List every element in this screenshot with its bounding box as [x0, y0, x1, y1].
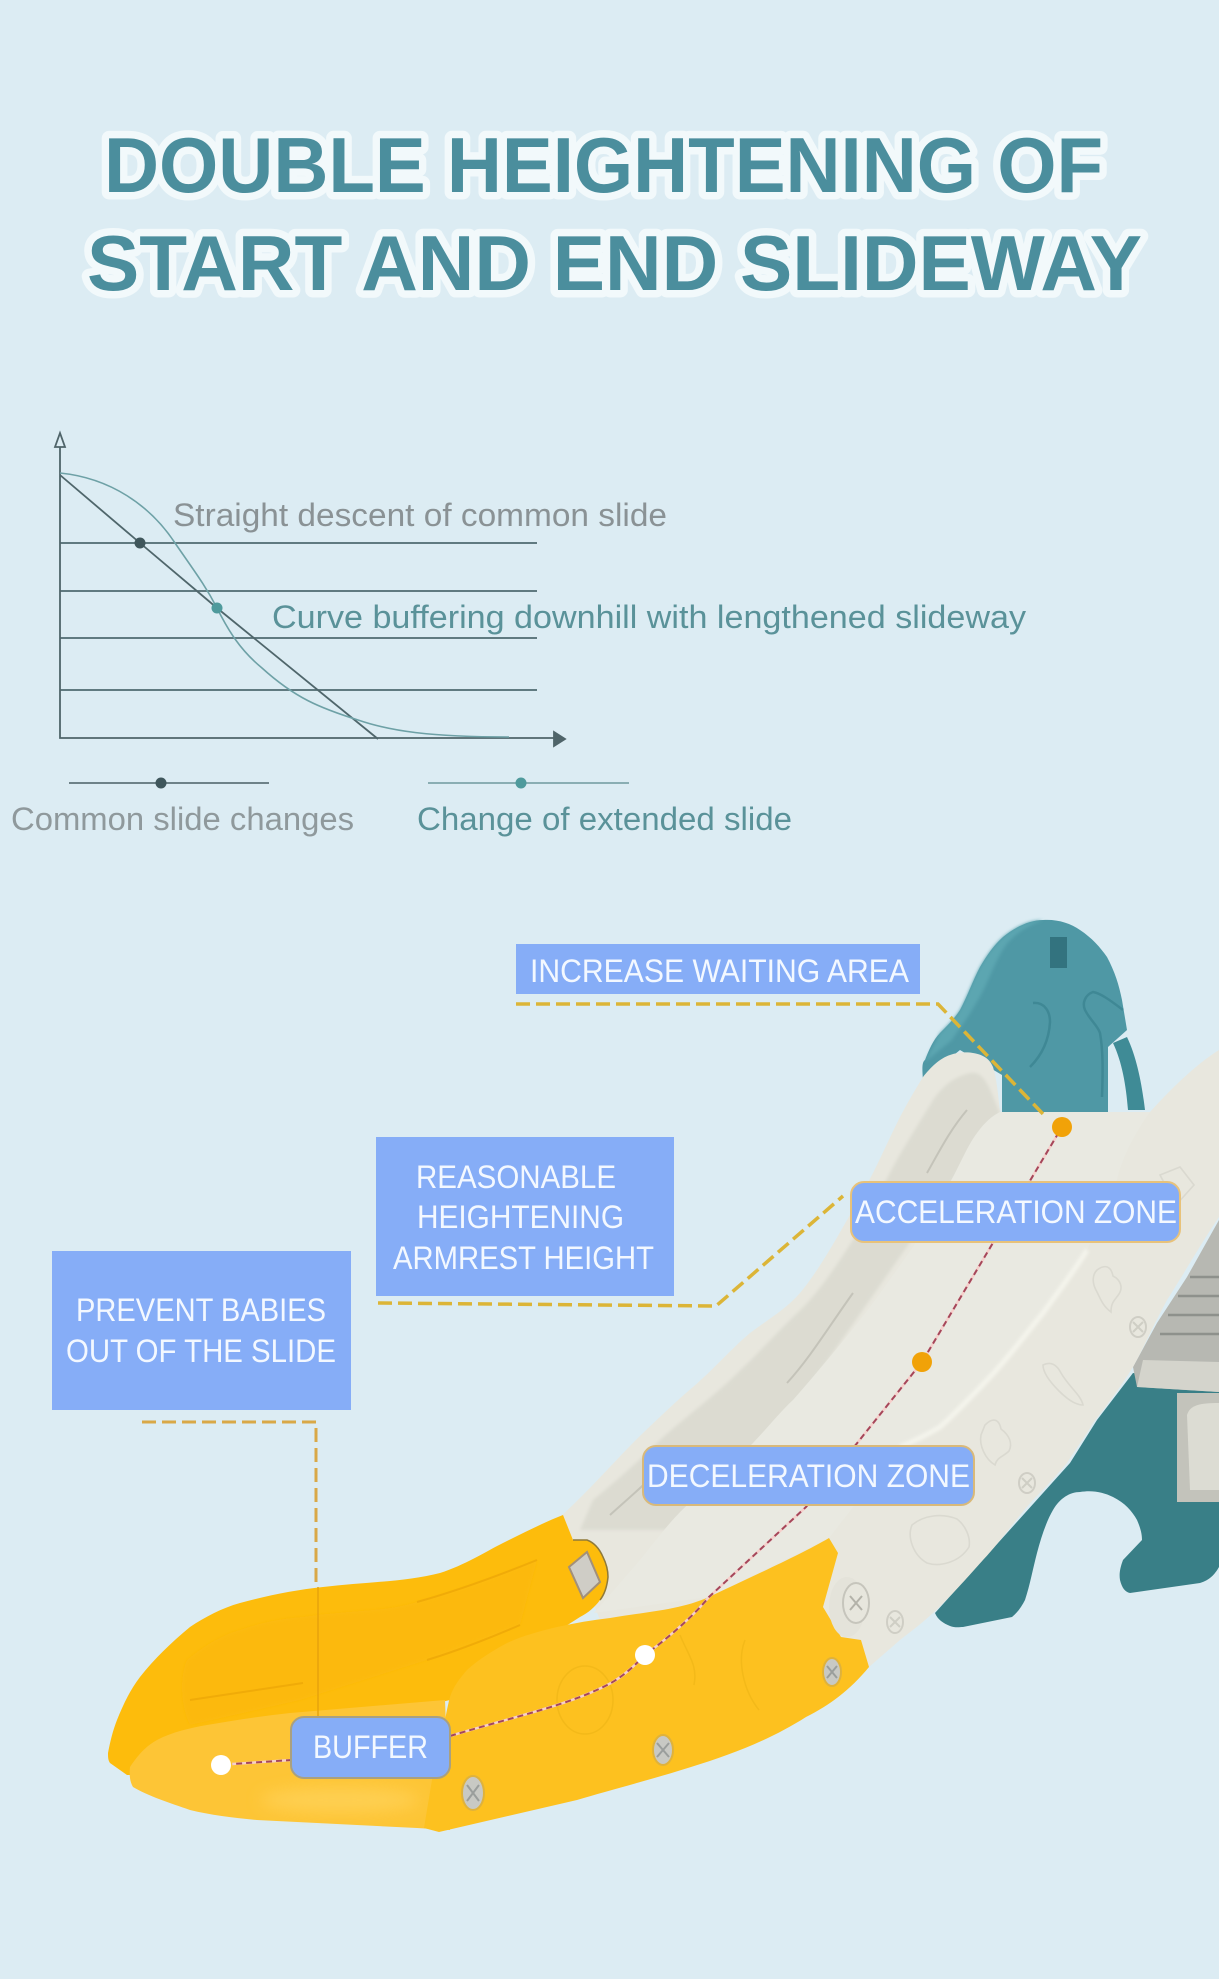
legend text common: Common slide changes — [11, 801, 354, 837]
white dot front wall — [635, 1645, 655, 1665]
upper step — [1133, 1220, 1219, 1392]
right wall fold highlight — [900, 1250, 1087, 1447]
grid lines — [60, 543, 537, 690]
callout: deceleration zone — [643, 1446, 974, 1505]
front yellow emboss — [557, 1635, 759, 1734]
title — [87, 121, 1142, 307]
screw — [843, 1583, 869, 1623]
legend dot extended — [516, 778, 526, 788]
white dot landing — [211, 1755, 231, 1775]
label: straight descent: Straight descent of common slide — [173, 497, 667, 533]
box — [52, 1251, 351, 1410]
head slot — [1050, 937, 1067, 968]
zone dots — [211, 1117, 1072, 1775]
legend dot common — [156, 778, 166, 788]
legend line extended — [428, 782, 629, 784]
common slide dot — [134, 538, 146, 548]
slide head: blue penguin backrest — [922, 920, 1145, 1112]
boss — [829, 1577, 865, 1637]
handle — [1113, 1037, 1145, 1110]
line 3: ARMREST HEIGHT — [393, 1240, 654, 1276]
legend line common — [69, 782, 269, 784]
head light edge — [925, 920, 1043, 1062]
callout: increase waiting area — [516, 944, 920, 994]
title line 2: START AND END SLIDEWAY — [87, 219, 1142, 307]
line 2: HEIGHTENING — [417, 1199, 624, 1235]
upper step slats — [1160, 1277, 1219, 1334]
recess grooves — [610, 1110, 967, 1515]
legend: extended slide — [417, 778, 792, 837]
box — [643, 1446, 974, 1505]
line 1: PREVENT BABIES — [76, 1292, 326, 1328]
path dashes — [232, 1127, 1062, 1764]
box — [516, 944, 920, 994]
yellow landing surface — [130, 1700, 450, 1830]
peg outline — [573, 1540, 608, 1600]
callout: acceleration zone — [851, 1182, 1180, 1242]
orange dot middle — [912, 1352, 932, 1372]
yellow leader lines — [142, 1004, 1043, 1716]
red dashed zone path — [232, 1127, 1062, 1764]
label: curve buffering: Curve buffering downhill with lengthened slideway — [272, 599, 1026, 635]
leader: waiting area — [516, 1004, 1043, 1114]
upper step front — [1137, 1360, 1219, 1392]
large white screw boss — [829, 1577, 869, 1637]
callout: buffer — [291, 1717, 450, 1778]
orange dot top — [1052, 1117, 1072, 1137]
box — [376, 1137, 674, 1296]
box — [851, 1182, 1180, 1242]
leader: prevent babies — [142, 1422, 316, 1587]
text: ACCELERATION ZONE — [855, 1194, 1177, 1230]
slide white body — [560, 1050, 1219, 1667]
line chart: slide height comparison — [55, 433, 565, 746]
line 2: OUT OF THE SLIDE — [66, 1333, 336, 1369]
text: DECELERATION ZONE — [647, 1458, 970, 1494]
legend text extended: Change of extended slide — [417, 801, 792, 837]
head body — [922, 920, 1127, 1112]
callout: armrest height — [376, 1137, 674, 1296]
square peg — [569, 1552, 600, 1598]
leader: armrest height — [378, 1196, 843, 1306]
back yellow inner panel — [182, 1560, 537, 1725]
callout: prevent babies — [52, 1251, 351, 1410]
grey ladder steps — [1133, 1220, 1219, 1502]
front yellow wall — [424, 1538, 869, 1832]
box — [291, 1717, 450, 1778]
text: BUFFER — [313, 1729, 428, 1765]
text: INCREASE WAITING AREA — [530, 953, 910, 989]
landing highlight — [260, 1788, 420, 1812]
title line 1: DOUBLE HEIGHTENING OF — [104, 121, 1103, 209]
right wall embossed shapes — [910, 1167, 1194, 1564]
extended slide dot — [212, 602, 222, 614]
left wall recess — [580, 1073, 1000, 1530]
line 1: REASONABLE — [416, 1159, 616, 1195]
wall screws — [887, 1317, 1146, 1633]
lower step cushion — [1187, 1403, 1219, 1490]
back yellow wall — [108, 1515, 608, 1775]
lower step — [1177, 1393, 1219, 1502]
legend: common slide — [11, 778, 354, 837]
common slide straight line — [60, 475, 378, 739]
leader over yellow — [317, 1587, 319, 1716]
path halo — [232, 1127, 1062, 1764]
yellow screws — [462, 1658, 841, 1810]
extended slide curve — [60, 473, 509, 737]
back yellow end — [108, 1515, 608, 1775]
axes — [55, 433, 565, 746]
teal support base — [935, 1373, 1219, 1627]
slide illustration — [108, 920, 1219, 1832]
head detail swirl — [1030, 1003, 1050, 1067]
sliding surface — [594, 1112, 1150, 1613]
back yellow groove lines — [190, 1560, 537, 1700]
